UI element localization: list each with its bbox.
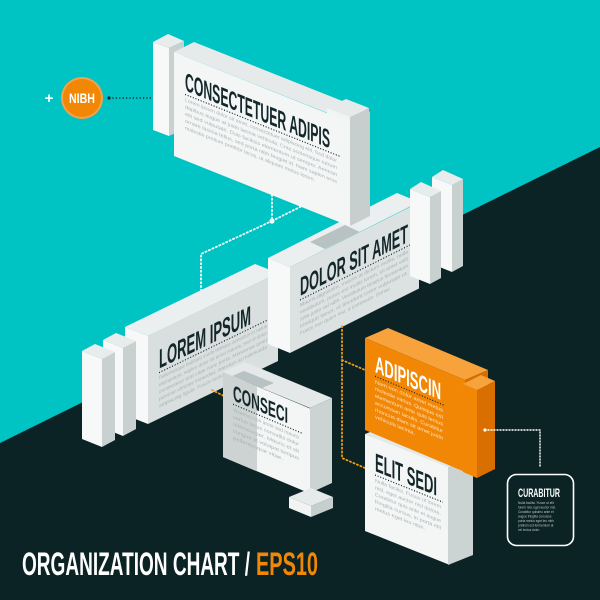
box: elit sedi: [365, 424, 473, 565]
box: adipiscin (orange): Nam non dolor amet metus: [375, 379, 443, 414]
box: lorem ipsum: elementum, sapien dolor sit amet mauris, sed ut dolor: [159, 330, 267, 389]
box: adipiscin (orange): rhoncus diam sit amet justo: [375, 407, 443, 442]
box: elit sedi: nisl, eget auctor nisl dolore.: [375, 485, 441, 517]
box: lorem ipsum: pulvinar ultricies imperdiet, interdum at malesuada: [159, 344, 267, 403]
callout: curabitur: vel lectus dolor.: [518, 528, 540, 532]
box: dolor sit amet: ante justo vel nibh. Vestibulum tempus fermentum: [300, 263, 409, 323]
badge: nibh: [45, 77, 103, 119]
small cube under conseci: [289, 488, 333, 517]
box: elit sedi: Nulla facilisi. Fusce ut lorem: [375, 478, 441, 510]
callout: curabitur: porta metus eget leo nibh: [518, 519, 554, 523]
box: consectetuer adipis: [153, 34, 370, 226]
heading: adipiscin: ADIPISCIN: [375, 351, 441, 406]
box: elit sedi: Curabitur quis ante et augue: [375, 492, 441, 524]
connector: orange pillar to callout: [483, 428, 540, 468]
callout: curabitur: [508, 474, 574, 546]
box: consectetuer adipis: dapibus augue at justo lacinia vehicula. Cras scelerisque rutrum: [185, 105, 337, 171]
box: lorem ipsum: LOREM IPSUM: [159, 300, 251, 375]
box: dolor sit amet: DOLOR SIT AMET: [300, 218, 408, 302]
box: conseci: varius lacus convallis dolor: [233, 414, 299, 448]
box: adipiscin (orange): [365, 328, 495, 478]
pillars: left of lorem ipsum: [82, 333, 136, 447]
box: lorem ipsum: Pellentesque habitant morbi tristique senectus et netus: [159, 323, 267, 382]
connector: nibh dotted line: [107, 96, 171, 100]
box: consectetuer adipis: molestie pretium porttitor lacus, ut aliquam metus lorem.: [185, 126, 315, 183]
pillar: orange: [463, 375, 495, 478]
box: consectetuer adipis: Lorem ipsum dolor sit amet, consectetuer adipiscing elit. Sed dolor: [185, 98, 337, 164]
connector: white dotted lines: [201, 191, 302, 300]
callout: curabitur: pretium est fermentum at: [518, 524, 554, 528]
box: conseci: congue at volutpat tempus: [233, 428, 299, 462]
connectors: orange dotted lines: [212, 326, 365, 468]
footer title: ORGANIZATION CHART /: [22, 546, 250, 582]
box: consectetuer adipis: elit sed vulputate. Duis facilisis elementum ut semper. Aenean: [185, 112, 337, 178]
callout: curabitur: lorem nisl, eget auctor nisl.: [518, 506, 556, 510]
box: dolor sit amet: tristique lacus, ut tincidunt tortor vulputate ut.: [300, 270, 408, 330]
box: elit sedi: fringilla cursus, in porta elit: [375, 499, 442, 532]
box: conseci: ullamcorper. Mauris et sit: [233, 421, 300, 455]
callout: curabitur: augue fringilla cursusus: [518, 514, 552, 518]
badge: nibh: NIBH: [69, 90, 95, 106]
heading: conseci: CONSECI: [233, 380, 288, 428]
box: dolor sit amet: Fusce non quam nisi, a commodo. Donec: [300, 286, 390, 337]
box: lorem ipsum: consectetur erat vitae nunc porta. Maecenas amet: [159, 337, 267, 396]
box: lorem ipsum: [125, 264, 278, 424]
callout: curabitur: Nulla facilisi. Fusce ut elit: [518, 501, 554, 505]
box: consectetuer adipis: CONSECTETUER ADIPIS: [185, 67, 330, 154]
box: conseci: pellentesque vitae.: [233, 435, 283, 462]
box: adipiscin (orange): molestie varius. Quisque est: [375, 386, 444, 421]
pillars: right of dolor sit amet: [410, 170, 463, 284]
box: conseci: Vivamus non amet sed mauris: [233, 407, 299, 441]
box: conseci: [223, 362, 333, 517]
box: dolor sit amet: [268, 193, 419, 353]
box: adipiscin (orange): elementum ante quis lectus: [375, 393, 443, 428]
box: consectetuer adipis: ornare lacinia tellus, sed porta nibh feugiat id. Nam sapien eros: [185, 119, 337, 185]
box: elit sedi: ELIT SEDI: [375, 448, 437, 502]
badge: nibh: +: [45, 90, 54, 107]
callout: curabitur: Curabitur quisimo ante et: [518, 510, 554, 514]
box: adipiscin (orange): accumsan iaculis. Curabitur: [375, 400, 443, 435]
box: elit sedi: metus eget leo nibh.: [375, 506, 425, 532]
box: adipiscin (orange): vehicula lacinia.: [375, 414, 415, 437]
box: lorem ipsum: adipiscing ligula. Fusce luctus nisi tellus.: [159, 360, 249, 410]
callout: curabitur: CURABITUR: [518, 486, 560, 500]
box: dolor sit amet: vestibulum, purus est mollis lorem, sit amet velit: [300, 256, 409, 316]
box: dolor sit amet: Mauris dignissim, mauris at dictum mollis, nulla: [300, 249, 408, 309]
footer title: EPS10: [256, 546, 318, 582]
